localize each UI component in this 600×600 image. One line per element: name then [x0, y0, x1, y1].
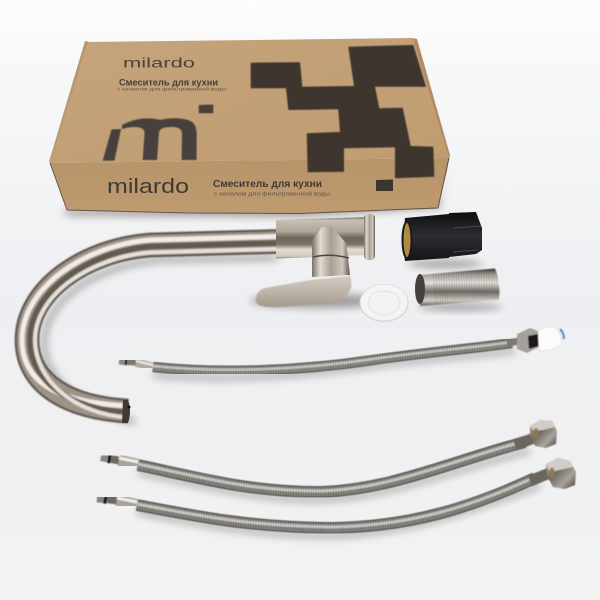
- filter hose shadow: [153, 351, 515, 378]
- pixel pattern: [251, 45, 434, 178]
- top brand name: milardo: [123, 54, 195, 70]
- filter hose tip: [119, 361, 153, 367]
- black plastic adapter: [402, 212, 483, 268]
- cardboard box: [49, 38, 450, 217]
- box edge lines: [50, 158, 449, 214]
- lower hose braid: [137, 477, 535, 528]
- box left flap: [49, 41, 90, 162]
- white washer: [360, 284, 408, 322]
- filter hose fitting: [507, 327, 564, 353]
- front brand name: milardo: [107, 176, 189, 198]
- upper hose nut: [515, 420, 557, 448]
- logo m mark: [103, 104, 213, 161]
- front product subtitle: с каналом для фильтрованной воды: [214, 190, 330, 198]
- lower hose nut: [530, 458, 576, 489]
- cylinder body: [419, 268, 500, 306]
- filter hose: [119, 327, 564, 378]
- front product title: Смеситель для кухни: [213, 178, 322, 190]
- horizontal body: [276, 217, 367, 258]
- box top face: [50, 38, 449, 163]
- upper hose braid: [138, 441, 525, 492]
- adapter body: [404, 212, 482, 261]
- spout outlet: [122, 400, 130, 423]
- threaded cylinder: [415, 268, 502, 310]
- body shadow: [250, 294, 390, 308]
- cylinder opening: [415, 274, 425, 304]
- pixel square on front: [376, 180, 393, 191]
- cylinder thread: [434, 284, 498, 288]
- spout shadow: [44, 258, 277, 422]
- filter hose braid: [153, 342, 512, 371]
- supply hose upper: [101, 420, 557, 500]
- adapter hex ridges: [453, 226, 481, 252]
- upper hose tip: [101, 456, 138, 465]
- curved spout: [22, 236, 277, 418]
- lower hose tip: [97, 498, 137, 505]
- vertical cartridge: [312, 227, 350, 277]
- adapter shadow: [407, 260, 483, 268]
- faucet: [22, 214, 390, 423]
- end flange: [364, 214, 375, 260]
- logo m stem: [103, 129, 121, 161]
- lever handle: [256, 276, 351, 307]
- box right flap: [412, 38, 450, 160]
- top product subtitle: с каналом для фильтрованной воды: [117, 86, 226, 92]
- box shadow: [62, 170, 448, 217]
- lower hose shadow: [137, 486, 540, 536]
- supply hose lower: [97, 458, 576, 536]
- upper hose shadow: [138, 451, 530, 500]
- top product title: Смеситель для кухни: [119, 78, 218, 88]
- box front face: [50, 158, 449, 213]
- adapter brass opening: [402, 222, 412, 258]
- logo m dot: [199, 104, 213, 113]
- cylinder shadow: [418, 304, 502, 310]
- cartridge ring: [313, 255, 349, 258]
- logo m arches: [122, 118, 197, 160]
